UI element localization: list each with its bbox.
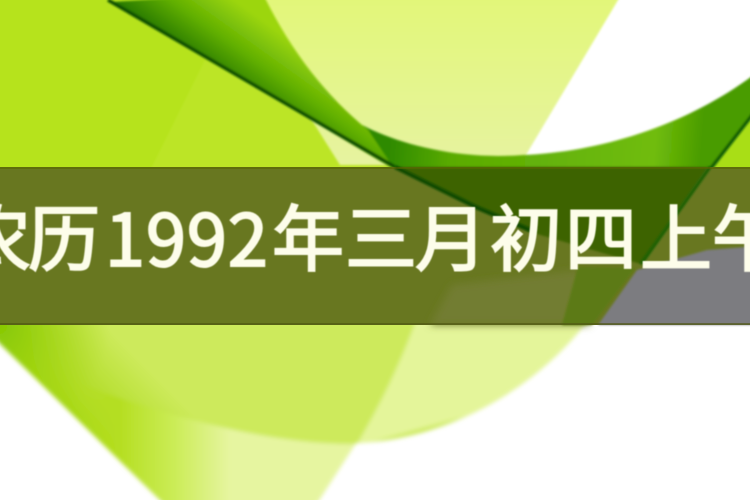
title text: [0, 181, 750, 287]
title text: 上: [640, 181, 712, 286]
title text: 年: [272, 181, 344, 286]
top-right lime corner: [705, 105, 750, 175]
top-left lime panel: [0, 0, 420, 175]
title text: 1992: [105, 182, 269, 287]
top pale lime panel: [230, 0, 624, 165]
lower lime sweep: [0, 315, 600, 500]
title text: 四: [565, 181, 637, 286]
title text: 三: [345, 181, 417, 286]
title text: 历: [28, 181, 100, 286]
title text: 月: [415, 181, 487, 286]
band: green triangle: [562, 267, 635, 325]
band: grey panel: [598, 246, 750, 325]
band: dark green wedge: [395, 167, 708, 264]
band: pale wedge: [430, 270, 590, 325]
green swoosh: [108, 0, 750, 172]
title text: 初: [490, 181, 562, 286]
dark title band: [0, 167, 750, 325]
